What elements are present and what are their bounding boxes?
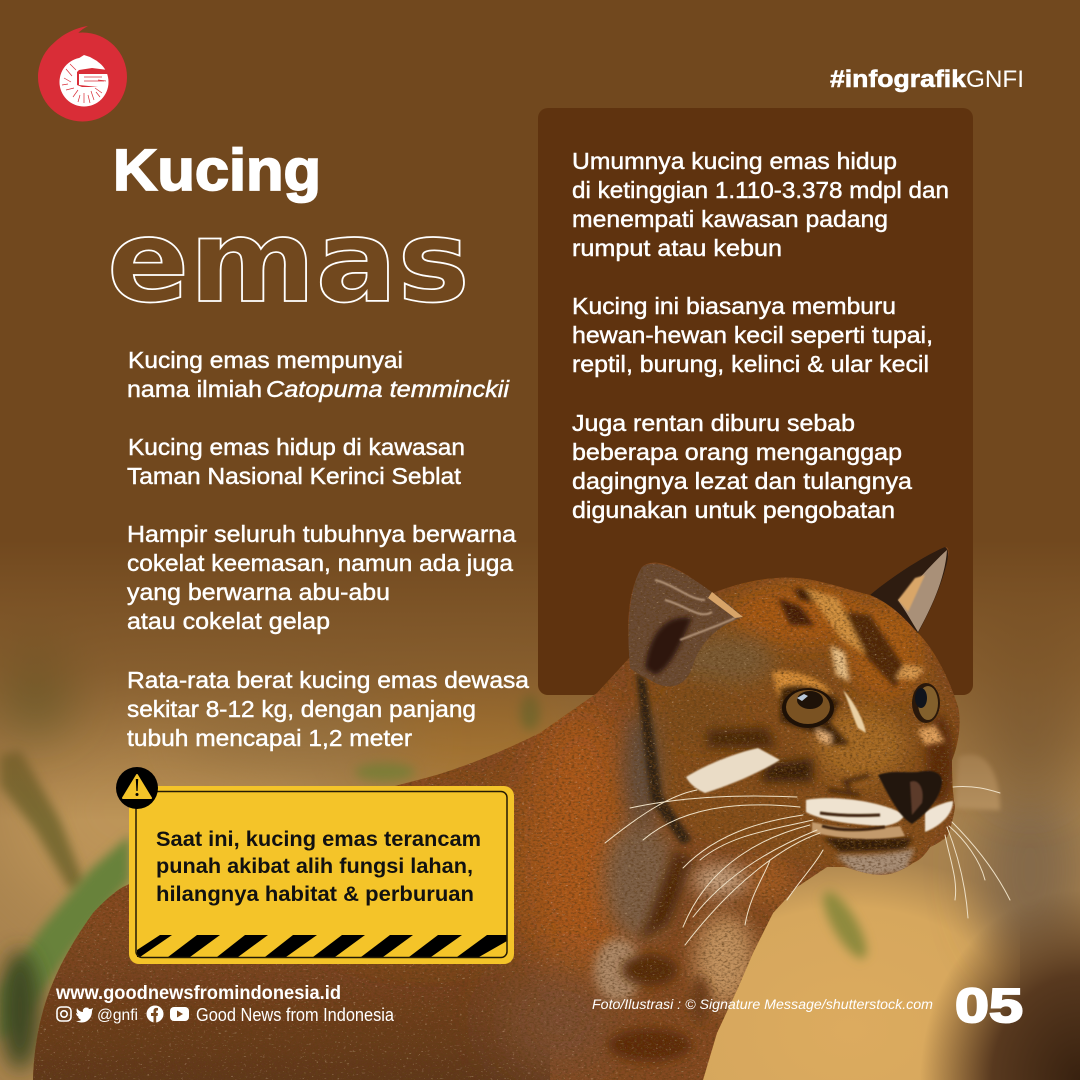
text block: elevation: menempati kawasan padang <box>572 206 888 232</box>
eye left <box>782 688 834 728</box>
text block: habitat <box>127 434 465 489</box>
callout: warning sign <box>116 767 514 964</box>
hashtag #infografikGNFI <box>830 66 1024 93</box>
head base tones <box>630 575 958 875</box>
warning text: hilangnya habitat & perburuan <box>156 883 474 906</box>
cat ear right <box>870 547 948 633</box>
text block: fur colour: atau cokelat gelap <box>127 608 330 634</box>
cat illustration: golden cat photo <box>33 547 1010 1080</box>
hashtag #infografikGNFI: #infografik <box>830 66 967 93</box>
whiskers <box>605 787 1010 945</box>
text block: hunted: digunakan untuk pengobatan <box>572 497 895 523</box>
text block: fur colour: cokelat keemasan, namun ada juga <box>127 550 513 576</box>
nose <box>878 771 942 824</box>
page number: 05 <box>955 980 1023 1033</box>
text block: prey: reptil, burung, kelinci & ular kecil <box>572 351 929 377</box>
title <box>107 138 470 328</box>
icon: twitter <box>76 1008 93 1023</box>
text block: scientific name: nama ilmiah <box>127 376 262 402</box>
text block: size <box>127 667 529 751</box>
text block: prey: Kucing ini biasanya memburu <box>572 293 896 319</box>
text block: fur colour: yang berwarna abu-abu <box>127 579 390 605</box>
icon: youtube <box>170 1007 189 1021</box>
text block: prey: hewan-hewan kecil seperti tupai, <box>572 322 933 348</box>
title: Kucing: Kucing <box>113 138 321 203</box>
text block: hunted: beberapa orang menganggap <box>572 439 902 465</box>
cat fur and markings <box>33 547 960 1080</box>
text block: habitat: Taman Nasional Kerinci Seblat <box>127 463 462 489</box>
icon: facebook <box>146 1006 164 1023</box>
text block: elevation: Umumnya kucing emas hidup <box>572 148 897 174</box>
text block: scientific name: Kucing emas mempunyai <box>128 347 403 373</box>
text block: scientific name: Catopuma temminckii <box>266 376 510 402</box>
warning stripes <box>137 935 507 957</box>
brow white mark <box>843 690 866 733</box>
text block: fur colour: Hampir seluruh tubuhnya berwarna <box>127 521 516 547</box>
warning text: punah akibat alih fungsi lahan, <box>156 855 473 878</box>
logo emblem <box>60 55 108 106</box>
hashtag #infografikGNFI: GNFI <box>966 66 1024 93</box>
warning text: Saat ini, kucing emas terancam <box>156 828 481 851</box>
text block: prey <box>572 293 933 377</box>
text block: hunted <box>572 410 912 523</box>
muzzle <box>806 798 905 826</box>
eye right <box>912 683 940 723</box>
photo credit: Foto/Ilustrasi : © Signature Message/shutterstock.com <box>592 997 933 1012</box>
text block: habitat: Kucing emas hidup di kawasan <box>128 434 465 460</box>
text block: hunted: Juga rentan diburu sebab <box>572 410 855 436</box>
footer: website and social <box>55 983 395 1025</box>
warning text <box>156 828 481 906</box>
logo: GNFI red speech mark <box>38 26 127 122</box>
text block: elevation <box>572 148 949 261</box>
text block: fur colour <box>127 521 516 634</box>
text block: scientific name <box>127 347 510 402</box>
social handle: @gnfi <box>97 1007 138 1024</box>
cheek white patch <box>686 748 780 793</box>
website url: www.goodnewsfromindonesia.id <box>55 983 341 1004</box>
text block: size: tubuh mencapai 1,2 meter <box>127 725 412 751</box>
text block: hunted: dagingnya lezat dan tulangnya <box>572 468 912 494</box>
chin <box>835 848 915 877</box>
text block: size: Rata-rata berat kucing emas dewasa <box>127 667 529 693</box>
facial markings <box>772 588 945 852</box>
cat ear left <box>628 564 743 686</box>
icon: warning triangle <box>116 767 158 809</box>
text block: elevation: di ketinggian 1.110-3.378 mdpl dan <box>572 177 949 203</box>
title: emas outlined: emas <box>107 195 470 328</box>
text block: size: sekitar 8-12 kg, dengan panjang <box>127 696 476 722</box>
panel: dark brown text panel <box>538 108 973 695</box>
icon: instagram <box>57 1007 71 1021</box>
brand name: Good News from Indonesia <box>196 1005 395 1025</box>
text block: elevation: rumput atau kebun <box>572 235 782 261</box>
